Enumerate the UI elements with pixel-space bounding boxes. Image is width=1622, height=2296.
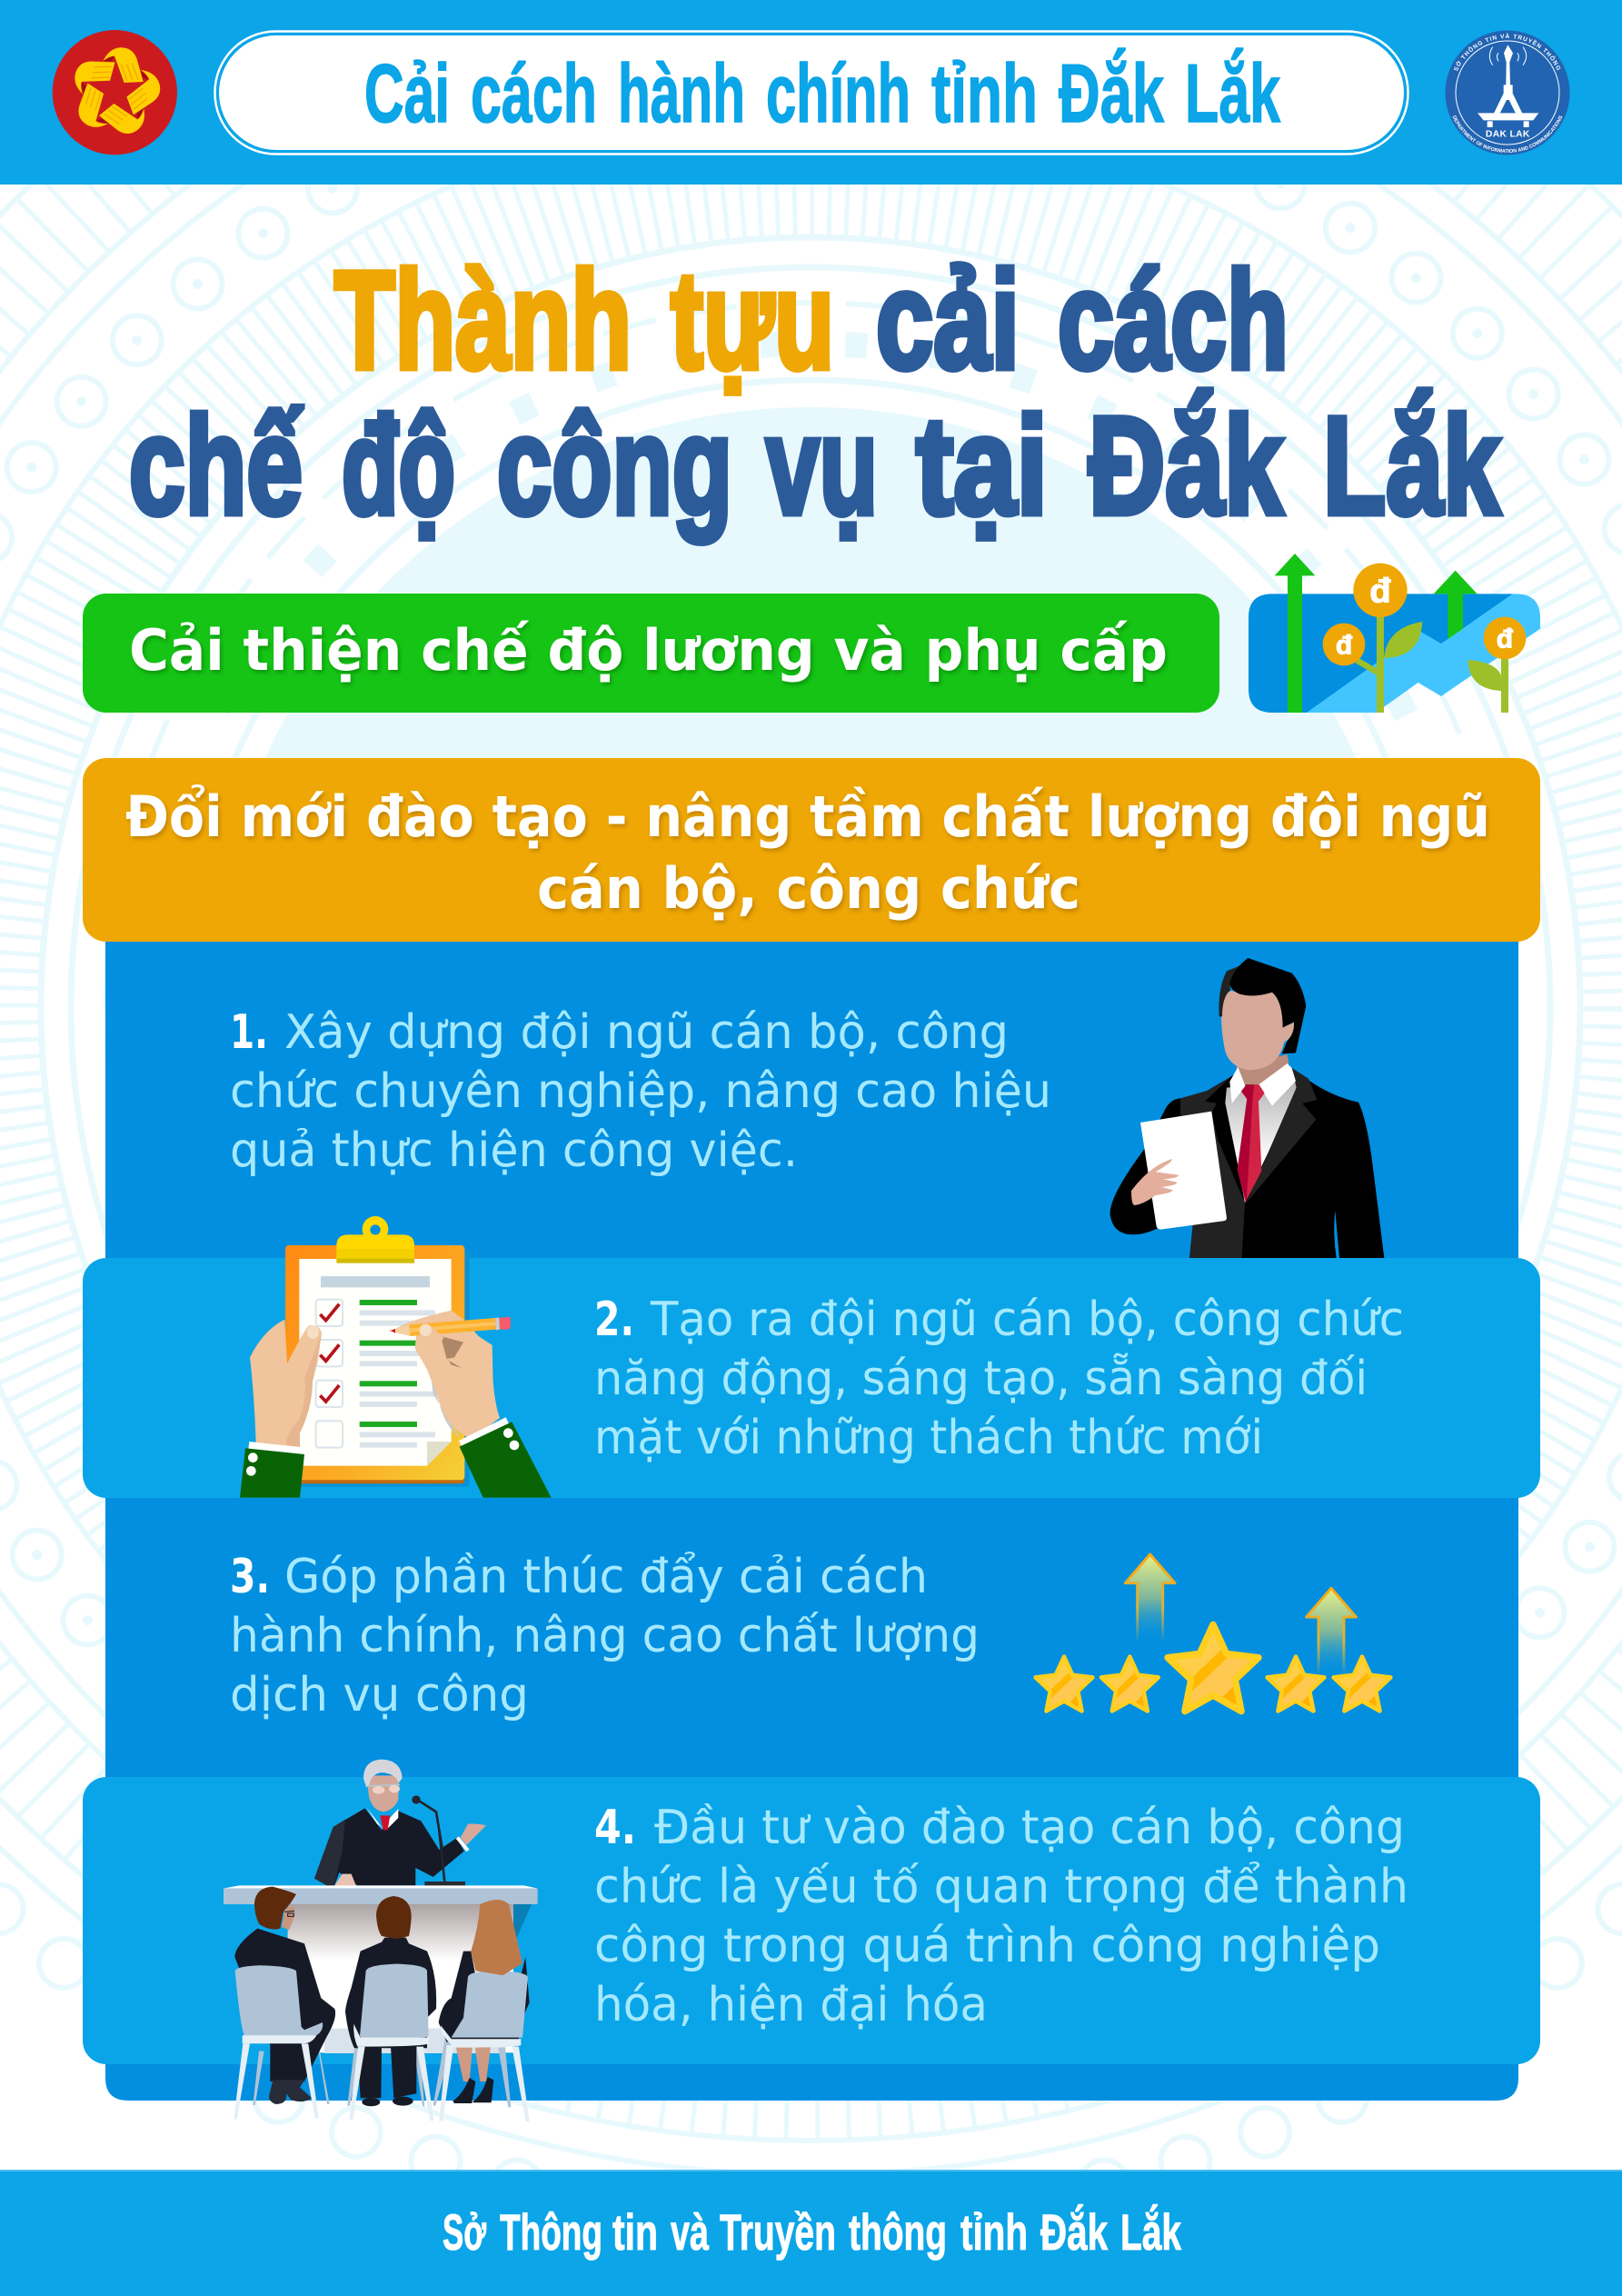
main title: Lắk — [1323, 388, 1501, 544]
icon: hands star emblem — [53, 30, 177, 155]
header band — [0, 0, 1622, 185]
panel: blue backing — [105, 927, 1518, 2101]
audience member 1 — [234, 1887, 335, 2120]
main title: vụ — [766, 388, 878, 544]
panel: training heading: cán bộ, công chức — [537, 855, 1080, 922]
main title: tựu — [671, 243, 834, 398]
header title: chính — [766, 48, 911, 140]
card 4 background — [83, 1777, 1540, 2064]
text block: item 1: Xây dựng đội ngũ cán bộ, công — [284, 1005, 1009, 1060]
text block: item 2: mặt với những thách thức mới — [594, 1411, 1263, 1465]
main title: công — [497, 388, 732, 544]
text block: item 3: Góp phần thúc đẩy cải cách — [284, 1550, 928, 1604]
main title — [129, 243, 1501, 544]
footer text: tin — [612, 2203, 658, 2261]
main title: chế — [129, 388, 304, 544]
text block: item 1: chức chuyên nghiệp, nâng cao hiệu — [230, 1064, 1051, 1119]
illustration: businessman with paper — [1110, 958, 1384, 1258]
icon: department seal: DEPARTMENT OF INFORMATION AND COMMUNICATIONS — [1452, 115, 1563, 153]
header title: Lắk — [1185, 48, 1280, 140]
main title: Đắk — [1089, 388, 1284, 544]
header title: Đắk — [1059, 48, 1164, 140]
main title: Thành — [334, 243, 632, 398]
text block: item 4: chức là yếu tố quan trọng để thành — [594, 1860, 1408, 1914]
footer text: tỉnh — [960, 2203, 1028, 2261]
footer text: Lắk — [1120, 2203, 1182, 2261]
text block: item 3: 3. — [230, 1550, 270, 1604]
footer text: Truyền — [720, 2203, 836, 2261]
text block: item 4: công trong quá trình công nghiệp — [594, 1919, 1380, 1973]
lectern top — [224, 1885, 538, 1904]
footer text: thông — [849, 2203, 947, 2261]
main title: tại — [916, 388, 1048, 544]
salary heading: Cải thiện chế độ lương và phụ cấp — [129, 617, 1168, 684]
icon: salary growth chart — [1249, 554, 1540, 713]
main title: cách — [1058, 243, 1289, 398]
speaker — [314, 1760, 486, 1889]
text block: item 4: hóa, hiện đại hóa — [594, 1978, 988, 2032]
footer text: và — [671, 2203, 710, 2261]
footer band — [0, 2170, 1622, 2296]
icon: salary growth chart: đ — [1336, 631, 1353, 661]
header title: Cải — [364, 48, 450, 140]
footer text — [443, 2203, 1182, 2261]
text block: item 1: 1. — [230, 1005, 268, 1060]
audience member 3 — [433, 1900, 530, 2121]
text block: item 4: Đầu tư vào đào tạo cán bộ, công — [654, 1801, 1405, 1855]
illustration: rising stars — [1036, 1554, 1390, 1712]
main title: cải — [876, 243, 1020, 398]
text block: item 1: quả thực hiện công việc. — [230, 1123, 798, 1178]
panel: training heading: Đổi mới đào tạo - nâng tầm chất lượng đội ngũ — [125, 784, 1490, 850]
illustration: speaker and audience — [224, 1760, 538, 2121]
text block: item 2: 2. — [594, 1293, 634, 1347]
header title: tỉnh — [931, 48, 1038, 140]
text block: item 4 — [594, 1801, 1408, 2032]
footer text: Thông — [500, 2203, 602, 2261]
audience member 2 — [345, 1896, 436, 2121]
footer text: Sở — [443, 2203, 486, 2261]
text block: item 3 — [230, 1550, 980, 1722]
panel: training heading — [83, 758, 1540, 942]
header title: hành — [618, 48, 745, 140]
header pill — [214, 31, 1408, 155]
icon: salary growth chart: đ — [1497, 624, 1514, 654]
footer text: Đắk — [1040, 2203, 1109, 2261]
text block: item 3: hành chính, nâng cao chất lượng — [230, 1609, 980, 1663]
text block: item 4: 4. — [594, 1801, 636, 1855]
text block: item 2: năng động, sáng tạo, sẵn sàng đối — [594, 1352, 1368, 1406]
icon: salary growth chart: đ — [1369, 572, 1391, 611]
icon: department seal: SỞ THÔNG TIN VÀ TRUYỀN THÔNG — [1454, 33, 1561, 71]
text block: item 1 — [230, 1005, 1051, 1178]
panel: salary improvement — [83, 594, 1219, 713]
main title: độ — [342, 388, 455, 544]
card 2 background — [83, 1258, 1540, 1498]
icon: department seal — [1445, 31, 1570, 155]
illustration: clipboard checklist — [240, 1216, 552, 1498]
header title — [364, 48, 1280, 140]
icon: department seal: DAK LAK — [1486, 130, 1530, 140]
header title: cách — [471, 48, 597, 140]
text block: item 2: Tạo ra đội ngũ cán bộ, công chức — [650, 1293, 1404, 1347]
text block: item 3: dịch vụ công — [230, 1668, 529, 1722]
text block: item 2 — [594, 1293, 1404, 1465]
